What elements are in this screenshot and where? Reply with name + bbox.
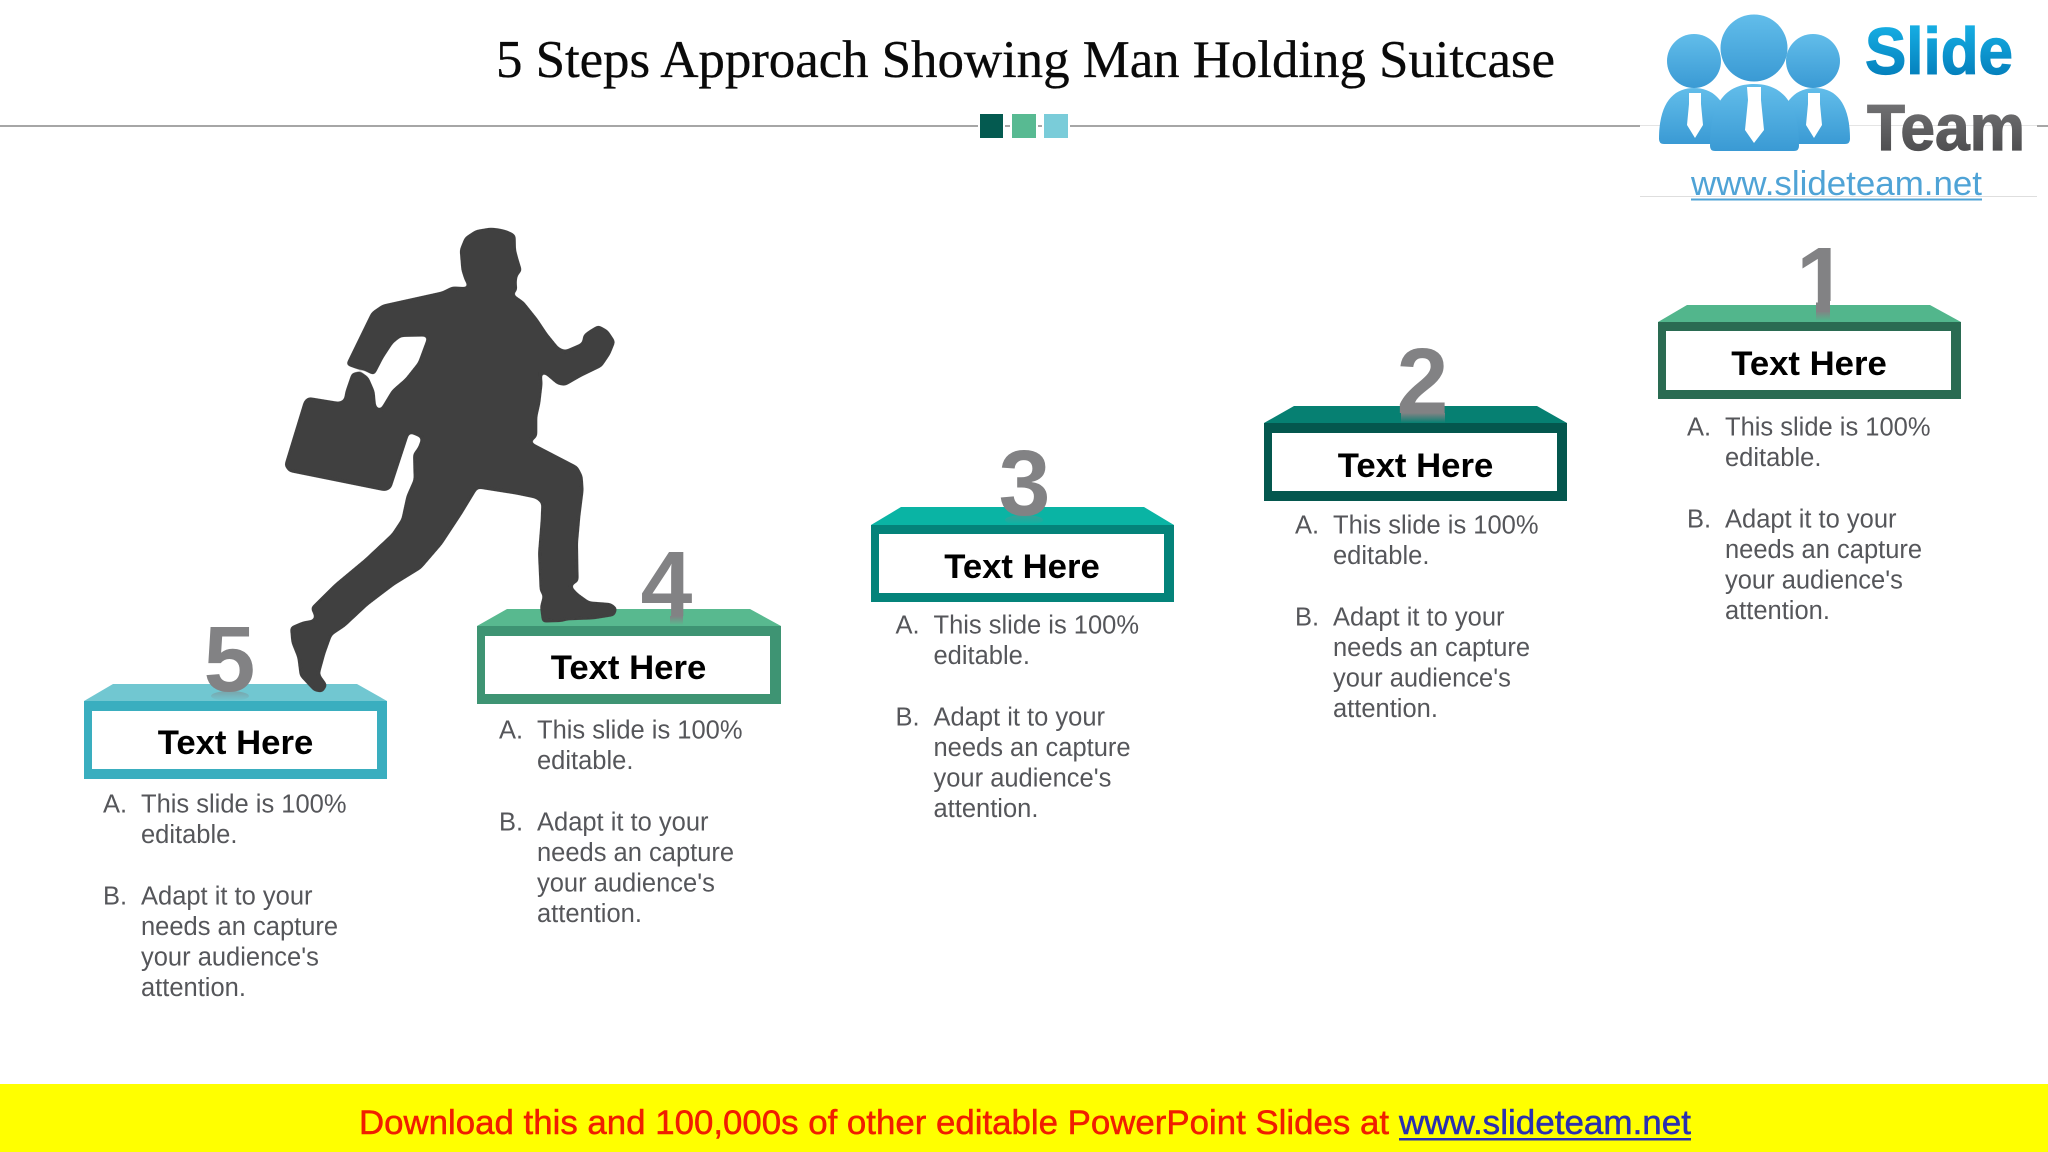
title: 5 Steps Approach Showing Man Holding Suitcase <box>496 31 1555 89</box>
step list 1: Adapt it to your <box>1725 506 1897 534</box>
step 4 <box>477 532 781 928</box>
step list 3: attention. <box>934 795 1038 823</box>
footer banner <box>0 1084 2048 1152</box>
step list 1: B. <box>1687 506 1711 534</box>
step list 5: B. <box>103 882 127 910</box>
step list 4: This slide is 100% <box>537 716 743 744</box>
step list 1: your audience's <box>1725 567 1903 595</box>
step list 3: your audience's <box>934 765 1111 793</box>
logo: SlideTeam <box>1640 14 2037 203</box>
platform 2 <box>1264 406 1567 501</box>
platform 4 <box>477 609 781 704</box>
step list 2: attention. <box>1333 695 1438 723</box>
footer banner: www.slideteam.net <box>1398 1104 1691 1142</box>
step 5 <box>84 607 387 1002</box>
step list 5: needs an capture <box>141 913 338 941</box>
step list 1: attention. <box>1725 597 1830 625</box>
step list 3 <box>896 612 1139 823</box>
step list 2: editable. <box>1333 542 1429 570</box>
step list 5 <box>103 790 347 1002</box>
step list 2: B. <box>1295 604 1319 632</box>
number 3: 3 <box>999 431 1050 535</box>
step list 3: Adapt it to your <box>934 704 1106 732</box>
step list 2 <box>1295 512 1539 723</box>
step list 2: Adapt it to your <box>1333 604 1505 632</box>
platform 3 <box>871 507 1174 602</box>
step list 5: Adapt it to your <box>141 882 313 910</box>
step heading 4: Text Here <box>551 649 706 687</box>
number 1: 1 <box>1796 228 1848 332</box>
number 5: 5 <box>204 607 255 711</box>
step list 5: This slide is 100% <box>141 790 347 818</box>
step heading 5: Text Here <box>158 724 313 762</box>
step list 5: attention. <box>141 974 246 1002</box>
step list 4 <box>499 716 743 928</box>
step list 5: A. <box>103 790 127 818</box>
step 2 <box>1264 329 1567 723</box>
header divider with three squares <box>0 114 2048 138</box>
step list 4: Adapt it to your <box>537 808 709 836</box>
step heading 2: Text Here <box>1338 447 1493 485</box>
number 4: 4 <box>641 532 693 636</box>
step list 5: editable. <box>141 821 237 849</box>
step 3 <box>871 431 1174 823</box>
icon: three business people <box>1659 14 1850 151</box>
step list 4: needs an capture <box>537 839 734 867</box>
platform 1 <box>1658 305 1961 399</box>
step list 4: your audience's <box>537 870 715 898</box>
step list 5: your audience's <box>141 944 319 972</box>
step list 2: This slide is 100% <box>1333 512 1539 540</box>
step list 1: needs an capture <box>1725 536 1922 564</box>
step list 3: This slide is 100% <box>934 612 1139 640</box>
number 2: 2 <box>1397 329 1448 433</box>
step list 4: A. <box>499 716 523 744</box>
step list 1 <box>1687 414 1931 625</box>
step list 1: A. <box>1687 414 1711 442</box>
step list 3: B. <box>896 704 920 732</box>
step list 4: editable. <box>537 747 633 775</box>
step list 1: This slide is 100% <box>1725 414 1931 442</box>
step list 1: editable. <box>1725 444 1821 472</box>
footer banner: Download this and 100,000s of other editable PowerPoint Slides at <box>359 1104 1389 1142</box>
logo: SlideTeam: www.slideteam.net <box>1690 165 1982 203</box>
step list 2: needs an capture <box>1333 634 1530 662</box>
icon: man running with suitcase silhouette <box>285 228 617 692</box>
number 1 <box>1802 248 1831 320</box>
step heading 1: Text Here <box>1731 345 1887 383</box>
step list 4: B. <box>499 808 523 836</box>
step 1 <box>1658 228 1961 625</box>
logo: SlideTeam: Team <box>1867 91 2025 164</box>
step list 3: needs an capture <box>934 734 1131 762</box>
platform 5 <box>84 684 387 779</box>
step list 2: your audience's <box>1333 665 1511 693</box>
step list 4: attention. <box>537 900 642 928</box>
step list 3: A. <box>896 612 920 640</box>
step heading 3: Text Here <box>944 548 1100 586</box>
step list 3: editable. <box>934 642 1030 670</box>
logo: SlideTeam: Slide <box>1865 14 2013 88</box>
step list 2: A. <box>1295 512 1319 540</box>
